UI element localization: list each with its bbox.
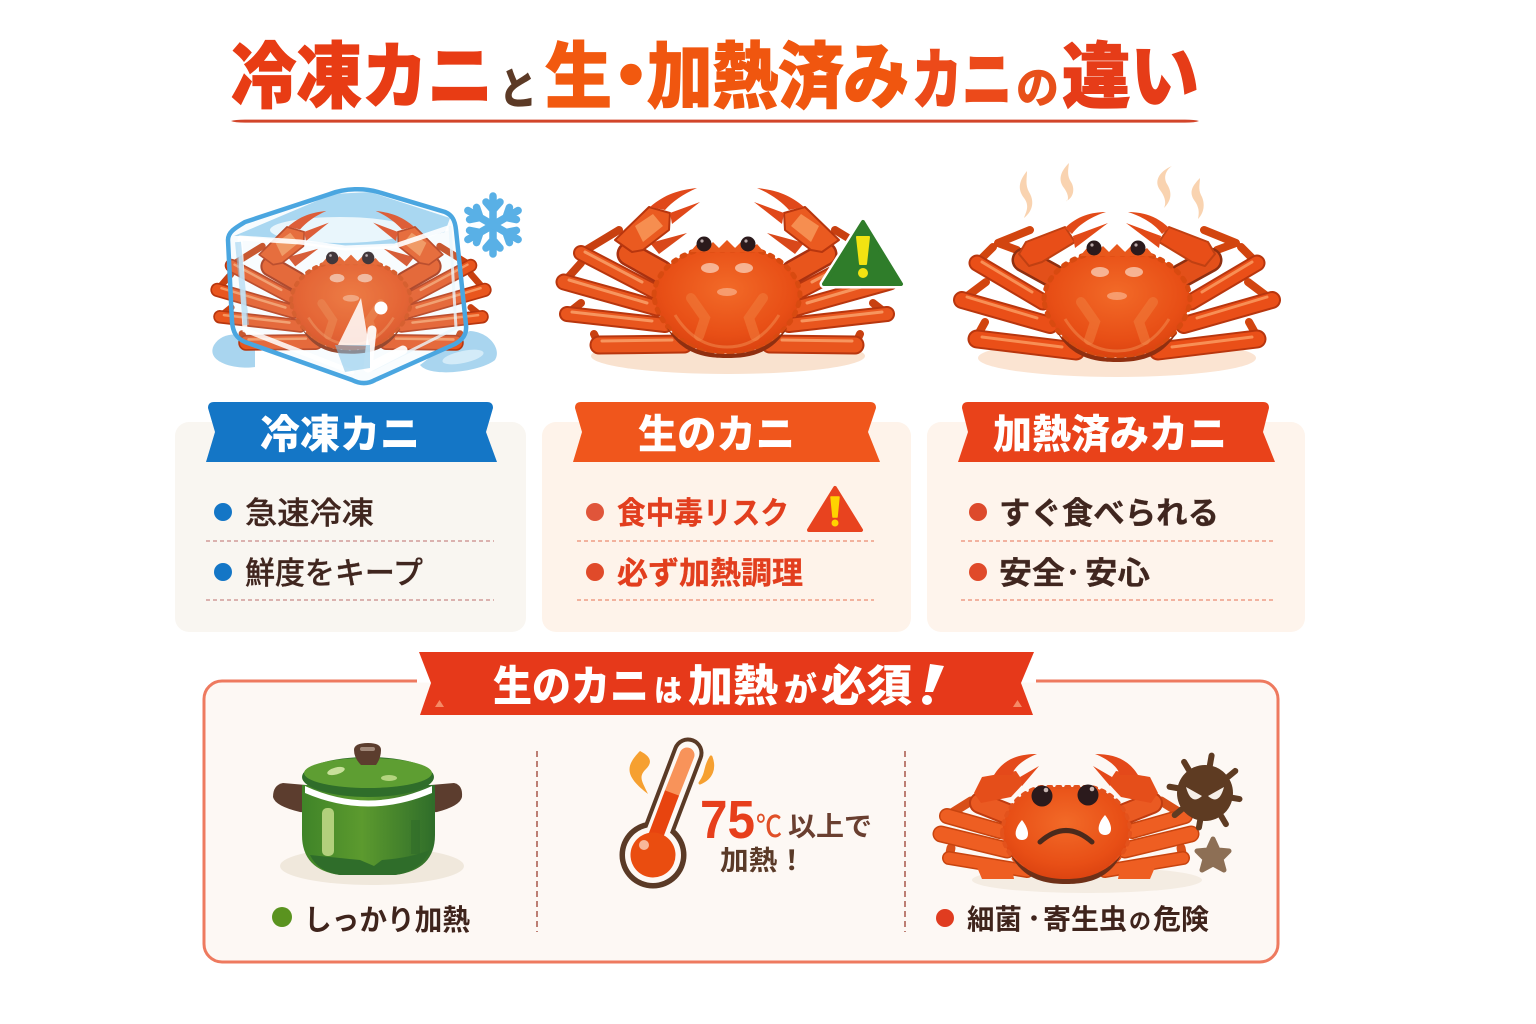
banner: heating required: 加熱: [688, 662, 778, 711]
ice cube: [228, 189, 466, 383]
meltwater puddles: [212, 331, 497, 372]
caption: bacteria and parasite danger: 寄生虫: [1043, 904, 1127, 935]
illustration: frozen crab in ice cube: [212, 189, 522, 383]
panel: cooked crab: [927, 402, 1305, 632]
banner: frozen crab: 冷凍カニ: [260, 413, 420, 457]
banner: raw crab: [573, 402, 880, 462]
banner: frozen crab: [206, 402, 497, 462]
callout: heat above 75 degrees: 75: [700, 790, 755, 850]
caption: bacteria and parasite danger: [936, 904, 1209, 935]
panel: heating required: [204, 652, 1278, 962]
item: food poisoning risk: [586, 488, 861, 531]
illustration: worried crab: [941, 754, 1202, 893]
item: keeps freshness: 鮮度をキープ: [245, 556, 423, 591]
item: ready to eat: すぐ食べられる: [999, 496, 1219, 531]
callout: heat above 75 degrees: 以上で: [788, 812, 872, 842]
ice top face: [234, 192, 450, 248]
caption: heat thoroughly: しっかり加熱: [304, 904, 470, 937]
icon: green pot: [273, 743, 464, 885]
banner: heating required: は: [654, 675, 682, 708]
banner: cooked crab: 加熱済みカニ: [993, 413, 1227, 457]
title: 加熱済み: [647, 38, 909, 118]
item: always cook: 必ず加熱調理: [617, 556, 803, 591]
icon: snowflake: [464, 196, 522, 254]
callout: heat above 75 degrees: [700, 790, 872, 876]
banner: heating required: 必須: [821, 662, 912, 711]
banner: cooked crab: [958, 402, 1275, 462]
callout: heat above 75 degrees: 加熱！: [720, 846, 806, 876]
icon: parasite star: [1197, 839, 1229, 870]
title: [231, 38, 1199, 118]
panel: raw crab: [542, 402, 911, 632]
title: ・: [595, 38, 667, 118]
item: safe: 安心: [1085, 556, 1150, 591]
illustration: cooked crab with steam: [962, 163, 1272, 377]
item: food poisoning risk: 食中毒リスク: [617, 496, 789, 531]
banner: heating required: [419, 652, 1034, 715]
title: 冷凍カニ: [231, 38, 493, 118]
frozen crab: [217, 211, 485, 354]
icon: green warning sign: [824, 222, 901, 284]
title: の: [1016, 64, 1059, 113]
item: safe: [969, 556, 1150, 591]
caption: bacteria and parasite danger: 危険: [1153, 904, 1209, 935]
caption: bacteria and parasite danger: の: [1129, 909, 1151, 934]
illustration: raw crab with warning: [564, 188, 901, 374]
banner: raw crab: 生のカニ: [638, 413, 795, 457]
title underline: [231, 120, 1199, 123]
banner: heating required: 生のカニ: [493, 663, 649, 710]
banner: heating required: が: [784, 671, 817, 708]
item: safe: 安全: [999, 556, 1065, 591]
title: と: [499, 65, 537, 114]
caption: bacteria and parasite danger: 細菌: [967, 904, 1022, 935]
title: 違い: [1062, 38, 1199, 118]
panel: frozen crab: [175, 402, 526, 632]
icon: steam: [1020, 163, 1204, 219]
icon: germ: [1163, 749, 1246, 834]
item: rapid freezing: 急速冷凍: [245, 496, 374, 531]
callout: heat above 75 degrees: ℃: [756, 811, 782, 844]
icon: thermometer: [620, 751, 713, 888]
title: 生: [545, 38, 612, 118]
title: カニ: [912, 43, 1012, 117]
